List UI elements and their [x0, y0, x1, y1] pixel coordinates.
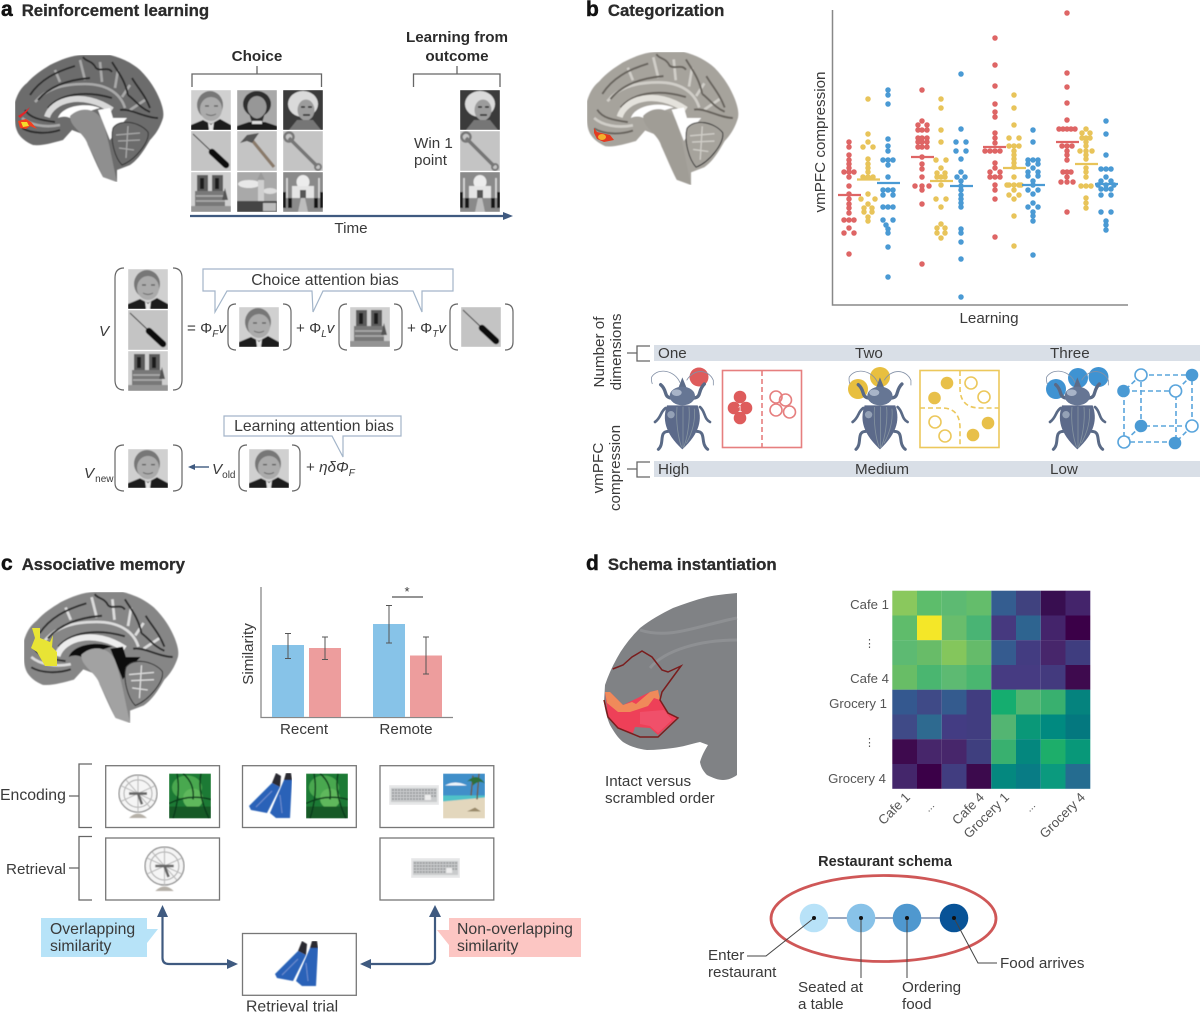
callout: learning attention bias: Learning attention bias	[234, 418, 394, 435]
label: enter restaurant: Enter	[708, 947, 744, 964]
brain scan with frontal activation	[15, 55, 163, 182]
red dots	[844, 13, 1075, 264]
heatmap: similarity matrix	[828, 591, 1090, 841]
beetle: two dimensions	[848, 367, 911, 449]
callout: learning attention bias	[224, 416, 401, 457]
bar chart: similarity: Recent	[280, 721, 329, 738]
bracket: outcome	[414, 66, 500, 87]
bar chart: similarity: Remote	[379, 721, 433, 738]
encoding pair: fins and forest	[242, 766, 356, 828]
inflated brain surface with activation	[604, 593, 737, 780]
panel: a reinforcement learning	[1, 0, 513, 491]
bar chart: similarity	[240, 584, 453, 738]
stimulus grid: choice	[191, 90, 323, 212]
heading: choice: Choice	[232, 48, 282, 65]
column labels: ...	[1023, 800, 1038, 815]
equation: choice value: v	[438, 320, 447, 337]
retrieval: fan	[106, 838, 220, 900]
axis title: vmPFC compression: vmPFC compression	[812, 72, 829, 212]
stimulus column: outcome	[460, 90, 500, 212]
equation: choice value: + Φ	[296, 320, 321, 337]
column labels: Grocery 4	[1037, 790, 1088, 841]
retrieval trial: fins	[242, 934, 356, 995]
equation: choice value: L	[321, 329, 327, 340]
band: vmPFC compression: Low	[1050, 461, 1078, 478]
text: win 1 point: Win 1	[414, 135, 453, 152]
equation: choice value	[99, 268, 513, 391]
band: vmPFC compression	[627, 461, 1200, 478]
panel: d schema instantiation	[586, 552, 1090, 1012]
equation: value update: V	[212, 461, 222, 478]
band: number of dimensions: Three	[1050, 345, 1090, 362]
equation: choice value: v	[218, 320, 227, 337]
band: number of dimensions	[627, 345, 1200, 362]
encoding pair: keyboard and beach	[380, 766, 494, 828]
axis label: number of dimensions: dimensions	[608, 313, 625, 390]
row labels: Grocery 4	[828, 771, 886, 786]
equation: value update: V	[84, 465, 94, 482]
panel: b categorization	[586, 0, 1200, 511]
equation: choice value: T	[432, 329, 439, 340]
panel letter c and heading: c Associative memory	[1, 552, 186, 575]
row labels: ⋮	[864, 737, 875, 749]
row labels	[828, 597, 889, 786]
bar chart: similarity: *	[404, 584, 410, 599]
category diagram: one dimension	[722, 370, 802, 448]
equation: choice value: = Φ	[187, 320, 212, 337]
caption: intact versus scrambled order: Intact versus	[605, 773, 691, 790]
beetle: one dimension	[651, 368, 713, 449]
equation: choice value: + Φ	[407, 320, 432, 337]
caption: intact versus scrambled order: scrambled order	[605, 790, 715, 807]
column labels: ...	[922, 800, 937, 815]
axis label: number of dimensions: Number of	[591, 317, 608, 387]
equation: choice value: V	[99, 323, 111, 340]
callout: choice attention bias	[203, 269, 453, 312]
axis label: vmPFC compression: compression	[607, 425, 624, 511]
label: food arrives: Food arrives	[1000, 955, 1085, 972]
label: enter restaurant: restaurant	[708, 964, 777, 981]
equation: value update: + ηδΦ	[306, 459, 349, 476]
heading: learning from outcome: outcome	[425, 48, 489, 65]
panel: c associative memory	[0, 552, 581, 1012]
heatmap cells	[892, 591, 1090, 789]
heading: restaurant schema: Restaurant schema	[818, 854, 953, 870]
callout: non-overlapping similarity: Non-overlapping	[457, 921, 573, 938]
equation: value update: new	[95, 474, 114, 485]
label: time: Time	[334, 220, 368, 237]
category diagram: three dimensions	[1117, 369, 1198, 449]
bar chart: similarity: Similarity	[240, 623, 257, 685]
column labels: Cafe 1	[875, 790, 913, 828]
label: seated at a table: Seated at	[798, 979, 863, 996]
arrow: fan retrieval to trial	[157, 905, 238, 969]
heading: learning from outcome: Learning from	[406, 29, 508, 46]
brain scan with yellow region	[24, 592, 178, 723]
arrowhead: time	[503, 212, 513, 220]
arrow: time	[190, 215, 504, 217]
axis label: vmPFC compression: vmPFC	[590, 443, 607, 493]
label: encoding: Encoding	[0, 787, 66, 804]
column labels: Grocery 1	[961, 790, 1012, 841]
column labels: Cafe 4	[949, 790, 987, 828]
retrieval: keyboard	[380, 838, 494, 900]
band: vmPFC compression: Medium	[855, 461, 909, 478]
band: number of dimensions: One	[658, 345, 687, 362]
callout: overlapping similarity	[41, 918, 158, 957]
callout: non-overlapping similarity	[437, 918, 581, 957]
text: win 1 point: point	[414, 152, 448, 169]
panel letter d and heading: d Schema instantiation	[586, 552, 777, 575]
arrow: keyboard retrieval to trial	[360, 905, 441, 969]
brain scan with ventral activation	[587, 52, 738, 185]
callout: non-overlapping similarity: similarity	[457, 938, 519, 955]
equation: choice value: v	[327, 320, 336, 337]
category diagram: one dimension: 1	[738, 405, 743, 414]
band: vmPFC compression: High	[658, 461, 689, 478]
equation: value update: old	[222, 470, 236, 481]
row labels: ⋮	[864, 638, 875, 650]
bracket: choice	[192, 66, 322, 87]
band: number of dimensions: Two	[855, 345, 883, 362]
row labels: Cafe 1	[850, 597, 889, 612]
category diagram: two dimensions	[920, 370, 999, 448]
bracket: encoding	[69, 764, 92, 828]
blue dots	[883, 74, 1114, 297]
chart: vmPFC compression dot plot	[812, 10, 1128, 327]
label: ordering food: Ordering	[902, 979, 961, 996]
label: retrieval: Retrieval	[6, 861, 66, 878]
callout: overlapping similarity: similarity	[50, 938, 112, 955]
row labels: Grocery 1	[829, 696, 887, 711]
row labels: Cafe 4	[850, 671, 889, 686]
equation: value update: F	[349, 468, 356, 479]
yellow dots	[861, 95, 1092, 246]
callout: overlapping similarity: Overlapping	[50, 921, 135, 938]
encoding pair: fan and forest	[106, 766, 220, 828]
axes	[832, 10, 1128, 305]
mean lines	[838, 142, 1118, 195]
bracket: retrieval	[69, 836, 92, 900]
equation: value update	[84, 445, 356, 491]
callout: choice attention bias: Choice attention bias	[251, 272, 399, 289]
axis title: learning: Learning	[959, 310, 1019, 327]
column labels	[875, 790, 1088, 841]
beetle: three dimensions	[1046, 367, 1108, 449]
equation: choice value: F	[212, 329, 219, 340]
schema diagram	[747, 876, 997, 978]
